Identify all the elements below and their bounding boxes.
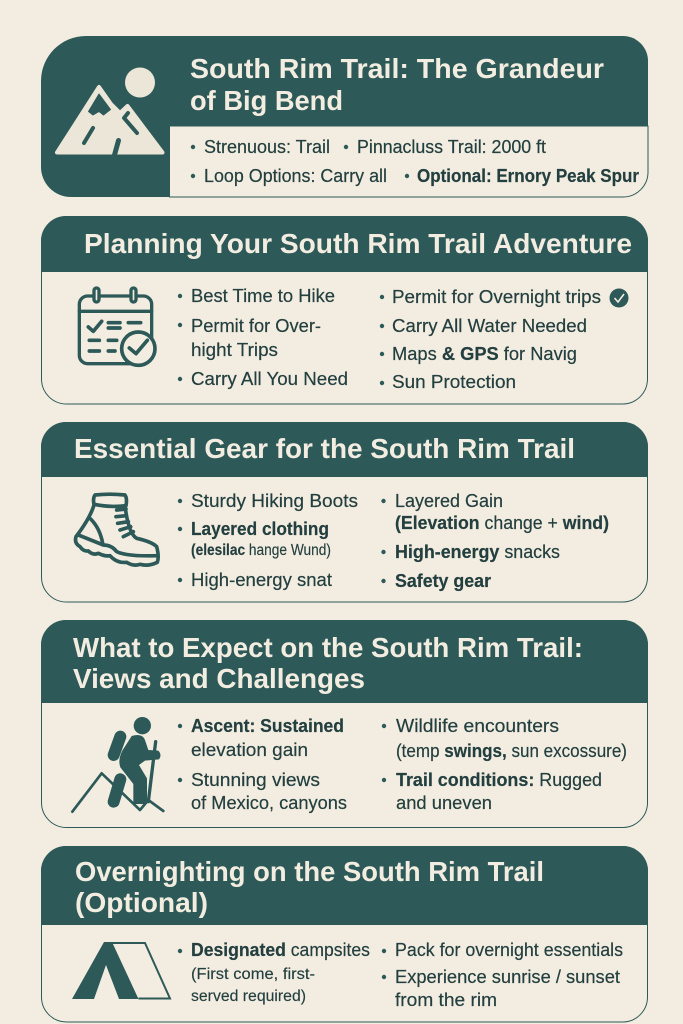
expect right list: Wildlife encounters	[396, 715, 559, 736]
planning left list: Best Time to Hike	[191, 285, 335, 306]
expect left list: Stunning views	[191, 769, 320, 790]
title: South Rim Trail: The Grandeur	[190, 53, 604, 84]
expect left list	[178, 715, 347, 813]
expect heading	[73, 632, 583, 694]
planning right list: Maps & GPS for Navig	[392, 343, 577, 364]
panel: overview	[41, 36, 648, 197]
overnight right list	[382, 939, 623, 1010]
icon: mountains and sun	[57, 68, 162, 155]
expect header band	[41, 620, 648, 703]
gear left list: High-energy snat	[191, 569, 332, 590]
gear left list: Layered clothing	[191, 518, 329, 539]
overnight heading	[75, 856, 544, 918]
expect right list	[382, 715, 627, 813]
planning right list: Permit for Overnight trips	[392, 286, 601, 307]
gear heading: Essential Gear for the South Rim Trail	[74, 433, 575, 464]
overnight right list: from the rim	[395, 989, 497, 1010]
overnight card outline	[42, 846, 648, 1022]
planning right list: Sun Protection	[392, 371, 516, 392]
expect right list: (temp swings, sun excossure)	[396, 740, 627, 761]
expect heading: What to Expect on the South Rim Trail:	[73, 632, 583, 663]
gear right list: Layered Gain	[395, 490, 503, 511]
title	[190, 53, 604, 116]
overnight left list: served required)	[191, 988, 306, 1005]
overnight left list: Designated campsites	[191, 939, 370, 960]
planning left list	[178, 285, 348, 389]
panel: overnighting	[41, 846, 648, 1022]
overnight left list: (First come, first-	[191, 966, 315, 983]
overview bullets	[191, 136, 639, 186]
planning left list: Carry All You Need	[191, 368, 348, 389]
expect right list: Trail conditions: Rugged	[396, 769, 602, 790]
planning left list: Permit for Over-	[191, 315, 321, 336]
title: of Big Bend	[190, 85, 343, 116]
overview card background	[41, 36, 648, 197]
planning card outline	[42, 216, 648, 404]
gear card outline	[42, 422, 648, 602]
panel: what to expect	[41, 620, 648, 828]
planning heading: Planning Your South Rim Trail Adventure	[84, 228, 632, 259]
expect card outline	[42, 620, 648, 828]
expect left list: of Mexico, canyons	[191, 792, 347, 813]
planning right list: Carry All Water Needed	[392, 315, 587, 336]
expect left list: elevation gain	[191, 739, 308, 760]
overnight right list: Experience sunrise / sunset	[395, 966, 620, 987]
icon: check badge	[610, 288, 628, 308]
icon: tent	[72, 942, 170, 999]
overview bullets: Optional: Ernory Peak Spur	[417, 165, 639, 186]
gear right list	[381, 490, 609, 591]
gear header band	[41, 422, 648, 477]
gear right list: (Elevation change + wind)	[395, 512, 609, 533]
icon: hiking boot	[75, 494, 158, 565]
overview list area	[170, 126, 648, 197]
panel: gear	[41, 422, 648, 602]
gear right list: High-energy snacks	[395, 541, 560, 562]
icon: calendar with check	[79, 288, 155, 365]
expect heading: Views and Challenges	[73, 663, 365, 694]
gear left list	[178, 490, 358, 590]
planning right list	[380, 286, 601, 392]
expect left list: Ascent: Sustained	[191, 715, 344, 736]
expect right list: and uneven	[396, 792, 492, 813]
planning header band	[41, 216, 648, 272]
panel: planning	[41, 216, 648, 404]
overnight header band	[41, 846, 648, 925]
overview bullets: Strenuous: Trail	[204, 136, 330, 157]
overview bullets: Loop Options: Carry all	[204, 165, 387, 186]
overnight left list	[178, 939, 370, 1005]
gear left list: (elesilac hange Wund)	[191, 542, 331, 559]
icon: hiker	[72, 717, 163, 812]
gear right list: Safety gear	[395, 570, 491, 591]
overnight heading: Overnighting on the South Rim Trail	[75, 856, 544, 887]
overnight heading: (Optional)	[75, 887, 208, 918]
overview bullets: Pinnacluss Trail: 2000 ft	[357, 136, 546, 157]
gear left list: Sturdy Hiking Boots	[191, 490, 358, 511]
planning left list: hight Trips	[191, 339, 278, 360]
overnight right list: Pack for overnight essentials	[395, 939, 623, 960]
